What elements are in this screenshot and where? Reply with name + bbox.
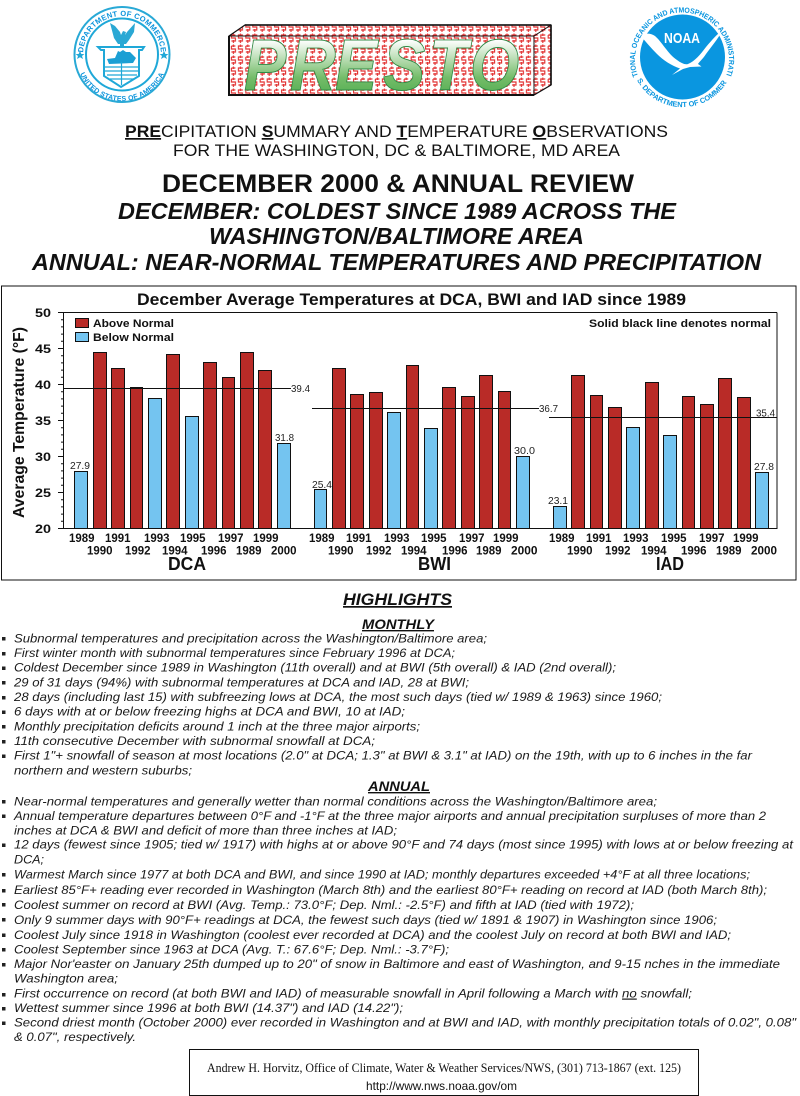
chart: IAD bars: 1989 xyxy=(549,531,575,545)
chart: DCA bars: 1992 xyxy=(125,544,151,558)
chart: IAD bars: IAD xyxy=(656,554,684,574)
chart: BWI bars: 1996 xyxy=(442,544,468,558)
title: program name: FOR THE WASHINGTON, DC & BALTIMORE, MD AREA xyxy=(173,141,621,160)
chart: BWI bars: 1989 xyxy=(476,544,502,558)
text block: annual bullets: Second driest month (October 2000) ever recorded in Washington and at BWI and IAD, with monthly precipitation totals of 0.02", 0.08" xyxy=(14,1016,797,1030)
chart: IAD bars: 1999 xyxy=(733,531,759,545)
chart: IAD bars: 1990 xyxy=(567,544,593,558)
chart: DCA bars: 1993 xyxy=(144,531,170,545)
chart: BWI bars: 1993 xyxy=(384,531,410,545)
chart: BWI bars: 1989 xyxy=(309,531,335,545)
title: program name xyxy=(125,122,668,160)
logo: NOAA emblem: NOAA xyxy=(664,30,700,47)
chart: DCA bars: 27.9 xyxy=(70,460,90,472)
panel: contact footer: http://www.nws.noaa.gov/om xyxy=(366,1079,517,1093)
chart: DCA bars: 1996 xyxy=(201,544,227,558)
panel: temperature chart xyxy=(2,286,796,580)
text block: monthly bullets: northern and western suburbs; xyxy=(14,763,192,777)
logo: Department of Commerce seal: DEPARTMENT OF COMMERCE xyxy=(78,10,166,52)
chart: BWI bars: 1990 xyxy=(328,544,354,558)
chart: IAD bars: 23.1 xyxy=(548,495,568,507)
text block: annual bullets: Wettest summer since 1996 at both BWI (14.37") and IAD (14.22"); xyxy=(14,1001,403,1015)
chart: DCA bars: 31.8 xyxy=(275,432,294,444)
text block: monthly bullets: 11th consecutive December with subnormal snowfall at DCA; xyxy=(14,734,375,748)
chart: DCA bars: 1990 xyxy=(87,544,113,558)
y axis and tick labels: 40 xyxy=(35,378,51,392)
text block: annual bullets: Major Nor'easter on January 25th dumped up to 20" of snow in Baltimore and east of Washington, and 9-15 nches in the immediate xyxy=(14,957,780,971)
chart: BWI bars: 1997 xyxy=(459,531,485,545)
chart: BWI bars: 1994 xyxy=(401,544,427,558)
chart: IAD bars xyxy=(548,376,777,574)
note: normal line: Solid black line denotes normal xyxy=(589,318,771,330)
text block: monthly bullets: Monthly precipitation deficits around 1 inch at the three major airports; xyxy=(14,719,420,733)
text block: annual bullets: DCA; xyxy=(14,852,44,866)
chart: BWI bars: BWI xyxy=(418,554,451,574)
chart: IAD bars: 1991 xyxy=(586,531,612,545)
y axis and tick labels: 35 xyxy=(35,414,51,428)
text block: monthly bullets: First 1"+ snowfall of season at most locations (2.0" at DCA; 1.3" at BWI & 3.1" at IAD) on the 19th, with up to 6 inches in the far xyxy=(14,749,753,763)
title: program name: PRECIPITATION SUMMARY AND TEMPERATURE OBSERVATIONS xyxy=(125,122,668,141)
heading: review titles: DECEMBER: COLDEST SINCE 1989 ACROSS THE xyxy=(118,198,677,224)
text block: annual bullets: Earliest 85°F+ reading ever recorded in Washington (March 8th) and the earliest 80°F+ reading on record at IAD (both March 8th); xyxy=(14,883,767,897)
chart: IAD bars: 1992 xyxy=(605,544,631,558)
heading: review titles: DECEMBER 2000 & ANNUAL REVIEW xyxy=(162,170,634,198)
text block: monthly bullets: First winter month with subnormal temperatures since February 1996 at DCA; xyxy=(14,646,455,660)
logo: PRESTO block: PRESTO xyxy=(244,26,519,106)
chart: IAD bars: 27.8 xyxy=(754,461,774,473)
text block: annual bullets: Coolest September since 1963 at DCA (Avg. T.: 67.6°F; Dep. Nml.: -3.7°F); xyxy=(14,942,449,956)
chart: BWI bars: 2000 xyxy=(511,544,538,558)
chart: BWI bars: 1999 xyxy=(493,531,519,545)
text block: monthly bullets: 29 of 31 days (94%) with subnormal temperatures at DCA and IAD, 28 at BWI; xyxy=(13,675,469,689)
chart: DCA bars: 1989 xyxy=(236,544,262,558)
text block: monthly bullets: 6 days with at or below freezing highs at DCA and BWI, 10 at IAD; xyxy=(14,705,405,719)
chart title: December Average Temperatures at DCA, BWI and IAD since 1989 xyxy=(137,291,686,309)
chart: DCA bars xyxy=(63,352,310,574)
text block: annual bullets: First occurrence on record (at both BWI and IAD) of measurable snowfall in April following a March with no snowfall; xyxy=(14,986,692,1000)
text block: annual bullets: Warmest March since 1977 at both DCA and BWI, and since 1990 at IAD; monthly departures exceeded +4°F at all three locations; xyxy=(14,868,750,882)
logo: Department of Commerce seal xyxy=(74,6,170,103)
legend: Above Normal xyxy=(93,318,174,330)
chart: IAD bars: 35.4 xyxy=(756,408,775,420)
y axis title: Average Temperature (°F) xyxy=(11,327,28,518)
text block: annual bullets: Near-normal temperatures and generally wetter than normal conditions across the Washington/Baltimore area; xyxy=(14,794,657,808)
chart: IAD bars: 1994 xyxy=(641,544,667,558)
y axis and tick labels: 20 xyxy=(35,522,51,536)
heading: review titles xyxy=(31,170,761,275)
chart: BWI bars: 1992 xyxy=(366,544,392,558)
chart: IAD bars: 2000 xyxy=(751,544,777,558)
chart: IAD bars: 1989 xyxy=(716,544,742,558)
heading: highlights: HIGHLIGHTS xyxy=(343,590,453,609)
text block: annual bullets: Annual temperature departures between 0°F and -1°F at the three major airports and annual precipitation surpluses of more than 2 xyxy=(13,809,766,823)
chart: DCA bars: 1994 xyxy=(162,544,188,558)
y axis and tick labels: 45 xyxy=(35,342,51,356)
text block: annual bullets: Only 9 summer days with 90°F+ readings at DCA, the fewest such days (tied w/ 1891 & 1907) in Washington since 1906; xyxy=(14,913,717,927)
chart: DCA bars: 1991 xyxy=(105,531,131,545)
y axis and tick labels xyxy=(35,306,777,536)
text block: annual bullets xyxy=(2,794,797,1044)
chart: DCA bars: 1997 xyxy=(218,531,244,545)
chart: BWI bars: 1991 xyxy=(346,531,372,545)
legend xyxy=(76,318,174,344)
y axis and tick labels: 50 xyxy=(35,306,51,320)
text block: monthly bullets xyxy=(2,631,753,777)
y axis and tick labels: 30 xyxy=(35,450,51,464)
y axis and tick labels: 25 xyxy=(35,486,51,500)
chart: IAD bars: 1993 xyxy=(623,531,649,545)
chart: BWI bars: 1995 xyxy=(421,531,447,545)
text block: annual bullets: Coolest summer on record at BWI (Avg. Temp.: 73.0°F; Dep. Nml.: -2.5°F) and fifth at IAD (tied with 1972); xyxy=(14,898,634,912)
panel: contact footer: Andrew H. Horvitz, Office of Climate, Water & Weather Services/NWS, (301) 713-1867 (ext. 125) xyxy=(207,1060,681,1075)
heading: review titles: ANNUAL: NEAR-NORMAL TEMPERATURES AND PRECIPITATION xyxy=(31,249,761,275)
text block: monthly bullets: 28 days (including last 15) with subfreezing lows at DCA, the most such days (tied w/ 1989 & 1963) since 1960; xyxy=(13,690,662,704)
chart: DCA bars: 1995 xyxy=(180,531,206,545)
chart: DCA bars: 2000 xyxy=(271,544,297,558)
logo: Department of Commerce seal: UNITED STATES OF AMERICA xyxy=(80,72,164,101)
chart: IAD bars: 1997 xyxy=(699,531,725,545)
text block: monthly bullets: Coldest December since 1989 in Washington (11th overall) and at BWI (5th overall) & IAD (2nd overall); xyxy=(14,661,616,675)
text block: annual bullets: inches at DCA & BWI and deficit of more than three inches at IAD; xyxy=(14,824,397,838)
heading: review titles: WASHINGTON/BALTIMORE AREA xyxy=(209,223,584,249)
chart: BWI bars: 25.4 xyxy=(312,479,332,491)
chart: BWI bars: 30.0 xyxy=(514,445,535,457)
logo: NOAA emblem xyxy=(630,7,734,108)
heading: monthly: MONTHLY xyxy=(362,616,436,632)
text block: annual bullets: 12 days (fewest since 1905; tied w/ 1917) with highs at or above 90°F and 74 days (most since 1995) with lows at or below freezing at xyxy=(14,838,794,852)
chart: IAD bars: 1995 xyxy=(661,531,687,545)
text block: annual bullets: Washington area; xyxy=(14,972,118,986)
chart: BWI bars xyxy=(309,366,558,574)
chart: BWI bars: 36.7 xyxy=(539,403,558,415)
text block: annual bullets: & 0.07", respectively. xyxy=(14,1030,136,1044)
chart: DCA bars: 39.4 xyxy=(291,383,310,395)
panel: contact footer xyxy=(190,1050,698,1096)
legend: Below Normal xyxy=(93,332,174,344)
text block: monthly bullets: Subnormal temperatures and precipitation across the Washington/Baltimore area; xyxy=(14,631,487,645)
heading: annual: ANNUAL xyxy=(367,778,430,794)
chart: DCA bars: 1989 xyxy=(69,531,95,545)
chart: IAD bars: 1996 xyxy=(681,544,707,558)
chart: DCA bars: 1999 xyxy=(253,531,279,545)
chart: DCA bars: DCA xyxy=(168,554,206,574)
text block: annual bullets: Coolest July since 1918 in Washington (coolest ever recorded at DCA) and the coolest July on record at both BWI and IAD; xyxy=(14,928,731,942)
